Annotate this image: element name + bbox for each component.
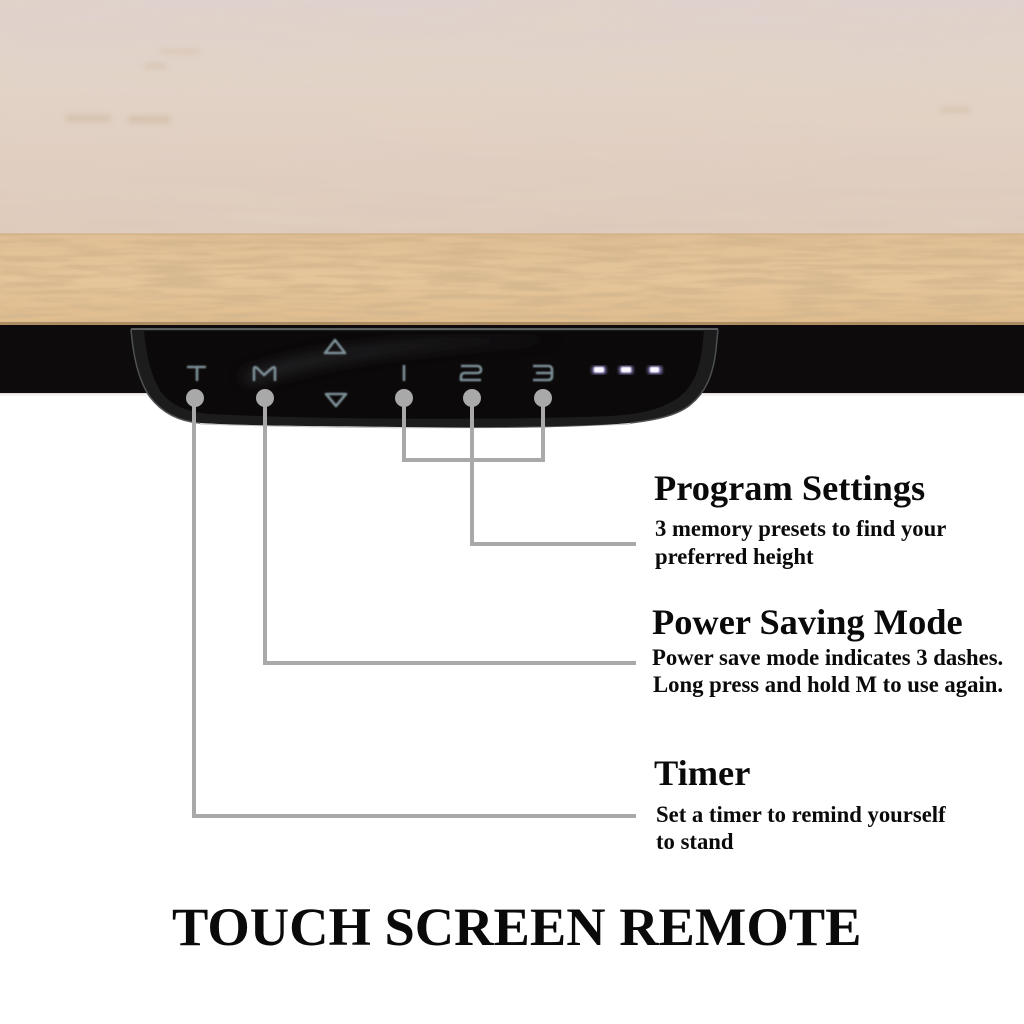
key: M [254, 367, 275, 381]
text block: program settings: preferred height [655, 544, 814, 569]
touch remote control body [131, 329, 718, 428]
text block: timer [654, 753, 946, 854]
text block: timer: Set a timer to remind yourself [656, 802, 946, 827]
key: 1 [403, 365, 405, 381]
text block: power saving mode: Long press and hold M to use again. [653, 672, 1003, 697]
text block: power saving mode: Power save mode indicates 3 dashes. [652, 645, 1003, 670]
remote key glyphs [187, 340, 552, 406]
connector: timer [186, 389, 636, 816]
power save dashes [592, 366, 662, 374]
text block: timer: to stand [656, 829, 734, 854]
text block: timer: Timer [654, 753, 750, 793]
connector: program settings [395, 389, 636, 544]
key: 3 [533, 366, 552, 380]
desk front edge [0, 233, 1024, 325]
text block: program settings: 3 memory presets to find your [655, 516, 946, 541]
icon: up arrow [325, 340, 345, 353]
text block: program settings [654, 468, 946, 569]
black frame bar [0, 325, 1024, 398]
key: T [187, 367, 206, 381]
connector: power saving mode [256, 389, 636, 663]
icon: down arrow [326, 394, 346, 406]
text block: power saving mode: Power Saving Mode [652, 602, 963, 642]
text block: power saving mode [652, 602, 1003, 697]
title: TOUCH SCREEN REMOTE [172, 896, 861, 957]
text block: program settings: Program Settings [654, 468, 925, 508]
key: 2 [461, 366, 481, 380]
desk top surface [0, 0, 1024, 234]
